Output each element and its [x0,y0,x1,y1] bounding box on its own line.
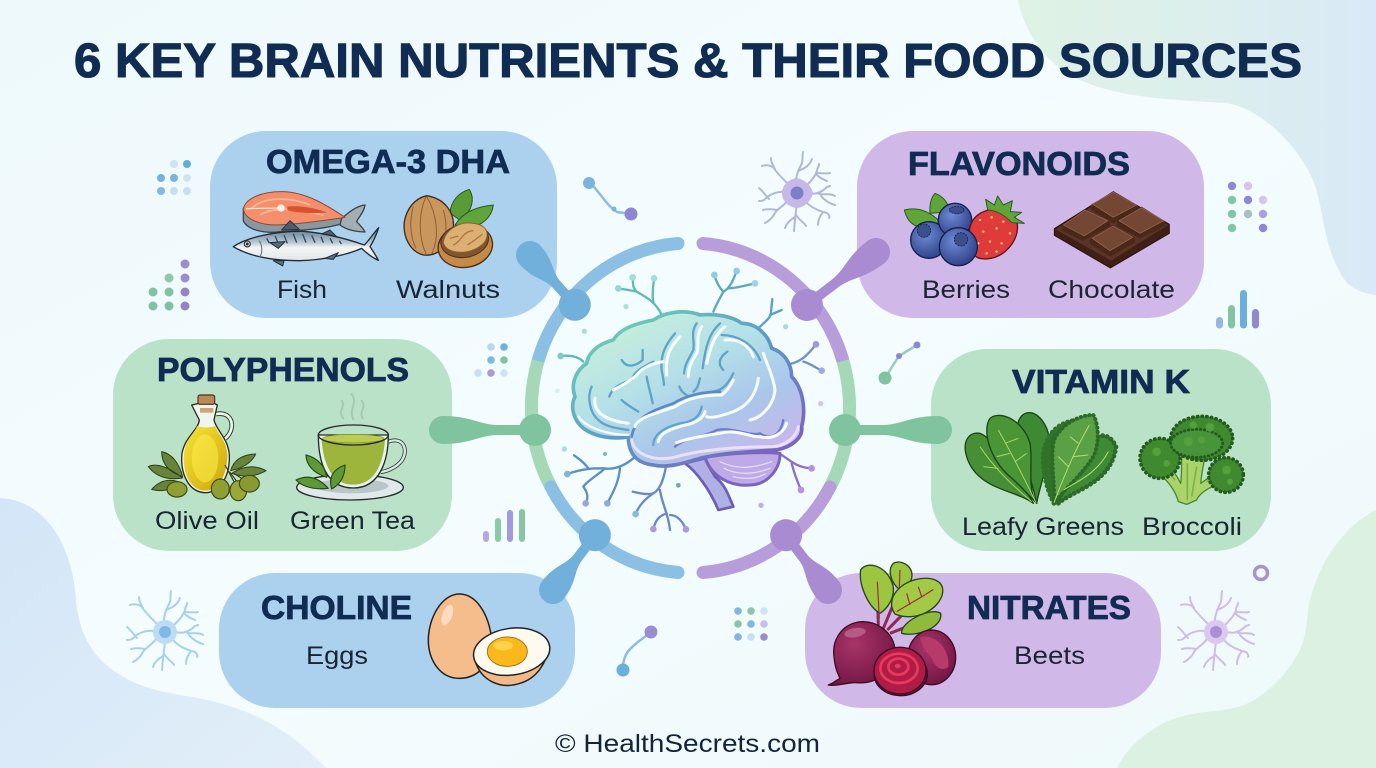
heading: Vitamin K: VITAMIN K [1012,363,1190,400]
title: 6 KEY BRAIN NUTRIENTS & THEIR FOOD SOURCES [74,35,1302,88]
cerebrum [573,312,804,466]
label: Fish: Fish [277,276,327,304]
icon: berries [904,193,1024,266]
neuron icon: bottom left [127,591,203,670]
connector: Omega-3 DHA [509,234,597,327]
decorative molecule: right [878,342,920,384]
panel: Flavonoids [857,131,1204,318]
icon: beets [828,562,956,696]
central hub: ring with connectors [429,231,952,611]
connector: Vitamin K [829,414,952,446]
label: Leafy Greens: Leafy Greens [962,513,1124,541]
decorative dot cluster: top left [157,160,191,195]
heading: Flavonoids: FLAVONOIDS [908,145,1130,182]
neural branches [561,271,822,530]
illustration: brain [555,268,825,533]
panel: Nitrates [805,562,1161,708]
decorative dot cluster: centre left [474,343,508,377]
heading: Nitrates: NITRATES [967,589,1131,626]
connector: Choline [532,513,617,611]
panel: Omega-3 DHA [210,131,557,318]
decorative dot cluster: top right [1228,182,1267,232]
icon: broccoli [1140,416,1243,504]
panel: Choline [219,573,575,708]
icon: chocolate [1054,192,1169,268]
heading: Choline: CHOLINE [261,589,412,626]
cortex folds [589,323,783,447]
label: Eggs: Eggs [306,642,368,670]
label: Olive Oil: Olive Oil [155,507,259,535]
decorative dot cluster: bottom centre [734,607,768,641]
decorative bar chart: right [1216,290,1259,328]
icon: fish [233,192,379,266]
label: Broccoli: Broccoli [1142,513,1242,541]
label: Walnuts: Walnuts [396,276,500,304]
label: Beets: Beets [1014,642,1085,670]
neuron icon: bottom right [1178,591,1254,670]
icon: walnuts [404,189,496,272]
icon: leafy greens [965,413,1116,503]
neuron icon: top right [759,152,835,231]
decorative dot chart: left [148,260,190,310]
decorative bar chart: lower left [483,509,525,542]
connector: Flavonoids [785,231,897,327]
icon: olive oil [148,395,266,501]
label: Berries: Berries [922,276,1010,304]
cerebellum folds [720,462,772,478]
footer: copyright: © HealthSecrets.com [555,730,820,758]
decorative molecule: bottom centre [616,626,658,676]
cerebellum [705,453,780,485]
label: Green Tea: Green Tea [290,507,415,535]
connector: Nitrates [764,513,849,611]
heading: Polyphenols: POLYPHENOLS [157,351,409,388]
heading: Omega-3 DHA: OMEGA-3 DHA [266,143,510,180]
decorative molecule: top centre [583,177,638,220]
panel: Vitamin K [931,349,1271,551]
ring arcs [531,244,850,572]
brain stem and cerebellum [685,458,733,510]
decorative ring [1254,566,1268,580]
icon: eggs [428,594,553,685]
panel: Polyphenols [113,339,452,551]
connector: Polyphenols [429,414,551,446]
icon: green tea [296,394,405,500]
label: Chocolate: Chocolate [1048,276,1175,304]
